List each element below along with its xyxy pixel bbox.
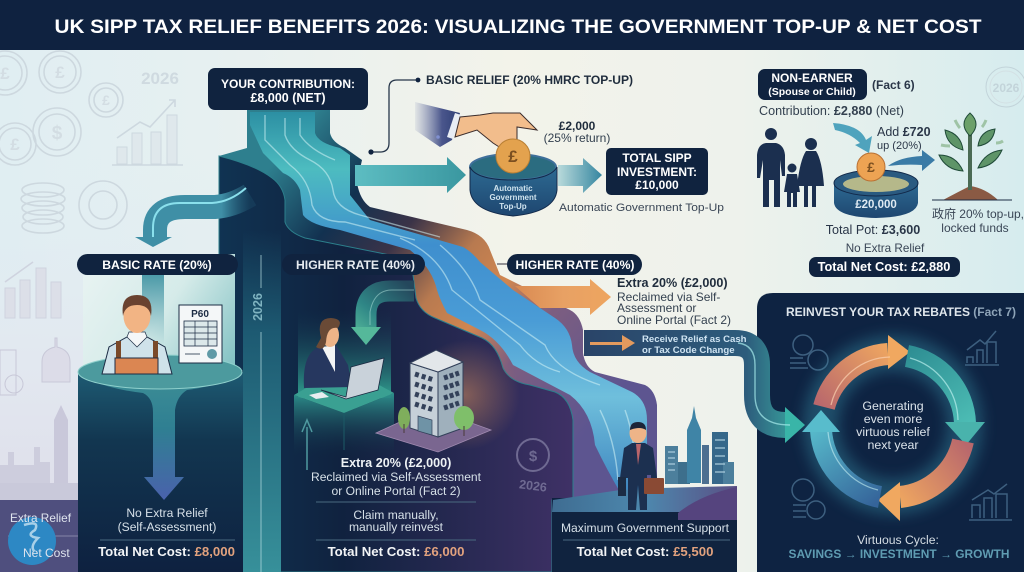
total SIPP investment box [606, 148, 708, 195]
basic rate pill: BASIC RATE (20%) [102, 258, 212, 272]
teal arrow to bowl [355, 157, 466, 193]
icon: growing plant [932, 113, 1012, 200]
watermark badge [8, 517, 56, 565]
icon: P60 form [179, 305, 222, 363]
cycle centre text: even more [864, 412, 922, 426]
plant caption: locked funds [941, 221, 1009, 235]
icon: top-up bowl with coin [470, 139, 557, 216]
total pot: Total Pot: £3,600 [826, 223, 920, 237]
text: automatic government top-up: Automatic Government Top-Up [559, 202, 724, 214]
receive relief text: or Tax Code Change [642, 345, 735, 356]
panel: higher rate text: Extra 20% (£2,000) [341, 456, 451, 470]
left label strip: Extra Relief [10, 511, 72, 525]
orange backdrop behind building [410, 340, 520, 450]
total net cost box: Total Net Cost: £2,880 [818, 259, 950, 274]
icon: 2026 dial: 2026 [993, 81, 1020, 95]
text: 2,000 return: (25% return) [544, 131, 610, 145]
savings investment growth: SAVINGS → INVESTMENT → GROWTH [788, 549, 1010, 561]
receive relief text [642, 334, 747, 356]
platform top [78, 355, 242, 389]
cycle centre text: next year [868, 438, 918, 452]
virtuous cycle caption: Virtuous Cycle: [857, 533, 939, 547]
higher rate pill, right: HIGHER RATE (40%) [516, 258, 634, 272]
curved arrow into higher rate [351, 290, 414, 345]
column strip with 2026 label: 2026 [251, 293, 265, 321]
icon: top-up bowl with coin: Government [489, 193, 537, 202]
icon: pot with coin: £20,000 [855, 199, 897, 211]
text: extra 20% reclaimed: Assessment or [617, 301, 696, 315]
total SIPP investment box: TOTAL SIPP [622, 151, 692, 165]
left label strip [0, 500, 78, 572]
your contribution box [208, 68, 368, 110]
icon: businessman [618, 422, 664, 510]
text: extra 20% reclaimed: Online Portal (Fact 2) [617, 313, 731, 327]
panel: higher rate text: Total Net Cost: £6,000 [328, 544, 464, 559]
background icons: coins, charts and London skyline: 2026 [141, 69, 179, 88]
panel: higher rate text: or Online Portal (Fact 2) [331, 484, 461, 498]
panel: maximum support: Maximum Government Support [561, 521, 730, 535]
funnel arrow down [78, 370, 243, 500]
plant caption: 政府 20% top-up, [932, 206, 1024, 221]
background icons: coins, charts and London skyline: £ [55, 63, 65, 82]
panel: basic rate column [78, 254, 243, 572]
cycle centre text: virtuous relief [856, 425, 930, 439]
arrow to plant [888, 150, 935, 171]
icon: P60 form: P60 [191, 309, 209, 320]
icon: 2026 dial [986, 67, 1024, 107]
your contribution box: YOUR CONTRIBUTION: [221, 77, 355, 91]
higher rate pill, right [497, 254, 642, 275]
your contribution box: £8,000 (NET) [250, 91, 326, 105]
cycle glow [821, 353, 965, 497]
column strip with 2026 label [243, 230, 281, 572]
icon: top-up bowl with coin: Automatic [493, 184, 533, 193]
add 720 text: Add £720 [877, 125, 931, 139]
text: extra 20% reclaimed: Reclaimed via Self- [617, 290, 720, 304]
non-earner badge [758, 69, 867, 100]
panel: higher rate text: Claim manually, [353, 508, 439, 522]
basic relief connector and label: BASIC RELIEF (20% HMRC TOP-UP) [426, 75, 633, 87]
icon: desk with woman at laptop [294, 318, 394, 470]
icon: top-up bowl with coin: Top-Up [499, 202, 527, 211]
background icons: coins, charts and London skyline [0, 51, 183, 500]
higher rate pill, left [282, 254, 425, 275]
background icons: coins, charts and London skyline: £ [10, 135, 20, 154]
text: no extra relief: No Extra Relief [126, 506, 208, 520]
non-earner badge: NON-EARNER [771, 71, 853, 85]
background icons: coins, charts and London skyline: £ [102, 92, 110, 108]
text: extra 20% reclaimed [617, 276, 731, 327]
cycle centre text: Generating [862, 399, 924, 413]
small orange arrow [590, 335, 635, 351]
orange arrow [515, 279, 611, 315]
relief band to cycle [584, 334, 805, 443]
curved arrow to pot [833, 123, 872, 153]
panel: non-earner [757, 67, 1024, 277]
basic relief connector and label [368, 75, 633, 155]
icon: worker [102, 295, 172, 374]
shell around money river [219, 110, 657, 572]
icon: 2026 clock [517, 439, 549, 495]
arrow to total [558, 158, 602, 193]
branch arrow to basic rate [135, 188, 250, 247]
dark column [219, 156, 573, 572]
icon: chart bottom right [969, 484, 1012, 520]
icon: coins top left [790, 335, 828, 370]
panel: maximum support [552, 486, 737, 572]
cycle arrow: teal [907, 356, 985, 445]
cycle arrow: red-orange [878, 441, 963, 521]
panel: higher rate text: Reclaimed via Self-Assessment [311, 470, 482, 484]
fact 6 label: (Fact 6) [872, 78, 915, 92]
icon: coins bottom left [792, 479, 825, 519]
cycle arrow: blue [802, 410, 880, 497]
receive relief text: Receive Relief as Cash [642, 334, 747, 345]
icon: chart top right [965, 331, 999, 365]
heading: REINVEST YOUR TAX REBATES (Fact 7) [786, 307, 1016, 319]
left label strip: Net Cost [23, 546, 70, 560]
background icons: coins, charts and London skyline: $ [52, 123, 63, 144]
basic rate pill [77, 254, 238, 275]
left pastel wash [0, 150, 240, 572]
text: 2,000 return [544, 119, 610, 145]
cycle centre text [856, 399, 930, 452]
up 20% text: up (20%) [877, 140, 922, 152]
total net cost: 8,000: Total Net Cost: £8,000 [98, 544, 235, 559]
title bar [0, 0, 1024, 50]
icon: pot with coin [834, 153, 918, 218]
higher rate pill, left: HIGHER RATE (40%) [296, 258, 415, 272]
text: self-assessment: (Self-Assessment) [118, 520, 216, 534]
panel: higher rate text: manually reinvest [349, 520, 444, 534]
icon: 2026 clock: 2026 [518, 477, 548, 495]
no extra relief: No Extra Relief [846, 242, 925, 255]
icon: 2026 clock: $ [529, 448, 538, 465]
teal backdrop behind woman [298, 310, 391, 398]
text: extra 20% reclaimed: Extra 20% (£2,000) [617, 276, 728, 290]
title bar: UK SIPP TAX RELIEF BENEFITS 2026: VISUALIZING THE GOVERNMENT TOP-UP & NET COST [54, 17, 982, 38]
total SIPP investment box: £10,000 [635, 178, 679, 192]
contribution line: Contribution: £2,880 (Net) [759, 104, 904, 118]
non-earner badge: (Spouse or Child) [768, 86, 856, 98]
panel: reinvest your tax rebates [757, 293, 1024, 572]
background icons: coins, charts and London skyline: £ [0, 64, 10, 83]
icon: top-up bowl with coin: £ [508, 147, 518, 166]
total SIPP investment box: INVESTMENT: [617, 165, 697, 179]
text: 2,000 return: £2,000 [559, 119, 596, 133]
panel: maximum support: Total Net Cost: £5,500 [577, 544, 713, 559]
panel: higher rate text [311, 456, 482, 559]
icon: city skyline [665, 406, 734, 484]
total net cost box [809, 257, 960, 277]
cycle arrow: orange [824, 335, 910, 407]
plant caption [932, 206, 1024, 235]
money river [250, 112, 647, 492]
icon: hand dropping coin [415, 102, 537, 152]
icon: family silhouette [757, 128, 824, 207]
icon: pot with coin: £ [867, 159, 875, 175]
icon: office building [376, 350, 491, 452]
